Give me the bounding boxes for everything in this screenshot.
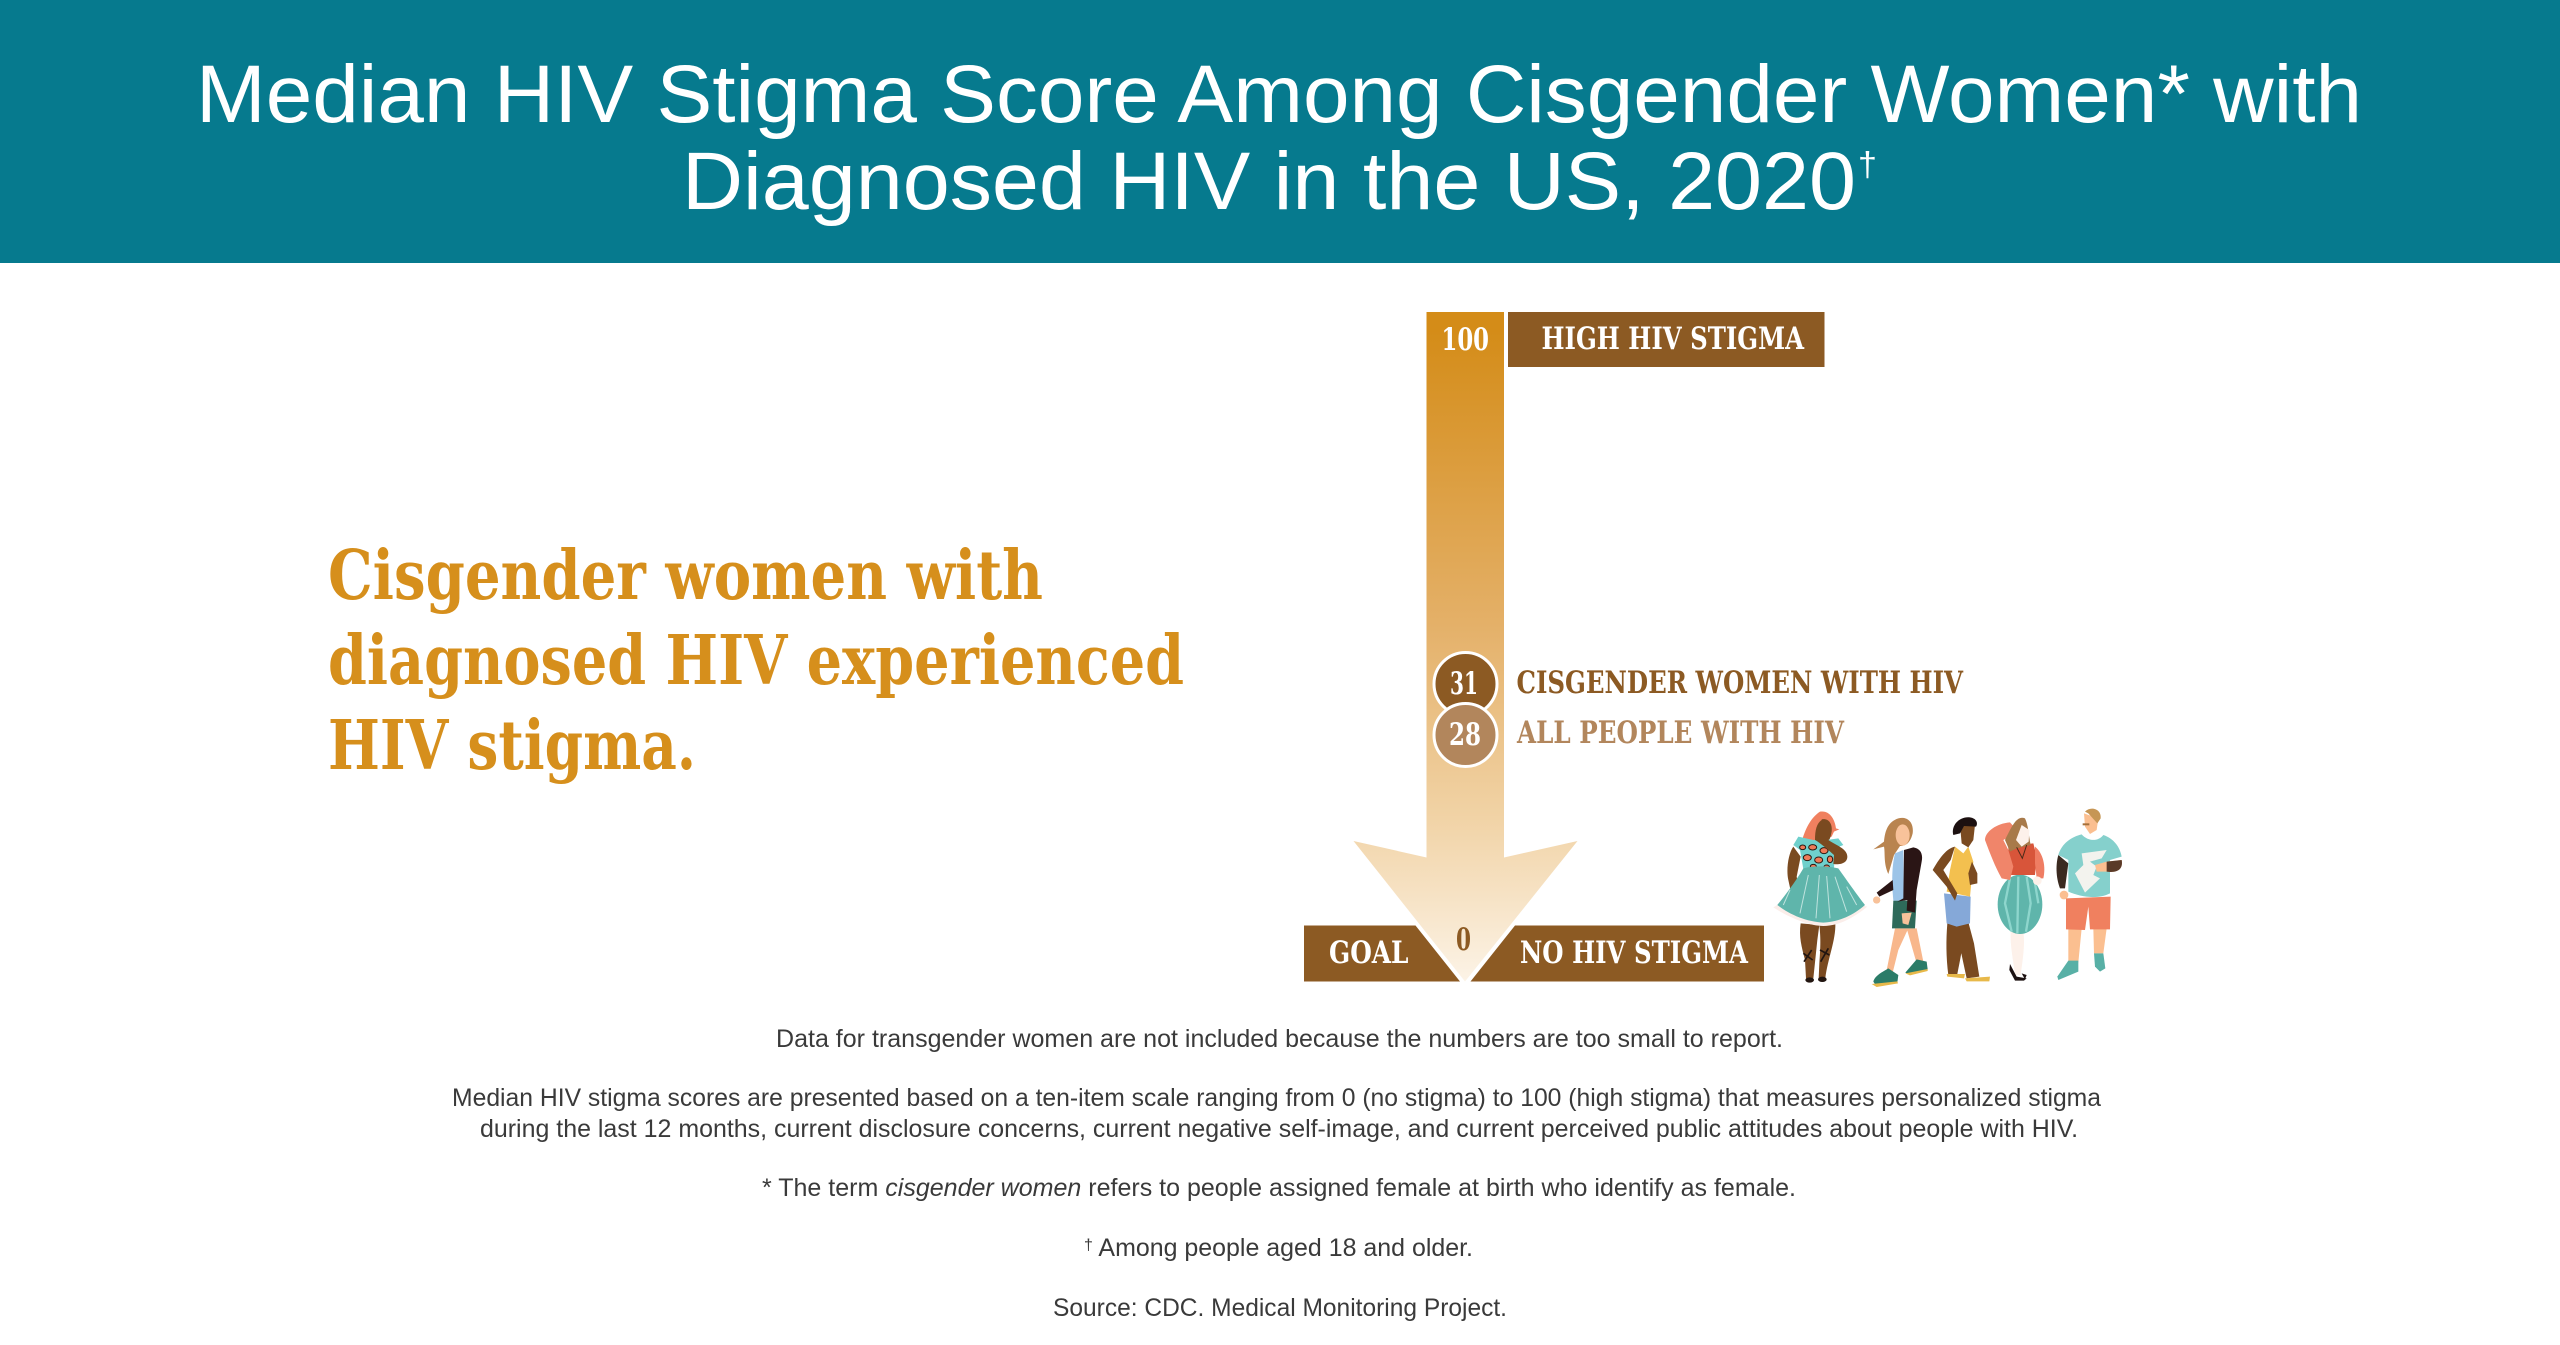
label: high HIV stigma	[1508, 312, 1824, 367]
person 2	[1872, 818, 1928, 987]
note: age range: †	[1084, 1237, 1093, 1254]
note: stigma scale explanation: during the last 12 months, current disclosure concerns, current negative self-image, and current perceived public attitudes about people with HIV.	[480, 1115, 2078, 1143]
footnotes	[452, 1025, 2101, 1322]
label: no HIV stigma	[1470, 926, 1764, 982]
note: source: Source: CDC. Medical Monitoring Project.	[1053, 1294, 1507, 1322]
person 5	[2057, 809, 2122, 980]
note: age range: Among people aged 18 and older.	[1093, 1234, 1473, 1262]
person 4	[1985, 818, 2044, 981]
title: Diagnosed HIV in the US, 2020	[682, 136, 1856, 227]
note: stigma scale explanation	[452, 1084, 2101, 1143]
person 3	[1933, 817, 1990, 981]
header banner	[0, 0, 2560, 263]
title	[196, 49, 2362, 227]
key message heading: HIV stigma.	[328, 706, 696, 786]
label: goal	[1304, 926, 1460, 982]
label: goal: GOAL	[1329, 935, 1409, 971]
marker: cisgender women 31: 31	[1450, 666, 1478, 702]
scale value 0: 0	[1456, 922, 1471, 958]
marker: cisgender women 31	[1434, 652, 1497, 716]
stigma scale arrow chart	[1304, 312, 1964, 982]
label: no HIV stigma: NO HIV STIGMA	[1520, 935, 1749, 971]
title: †	[1858, 146, 1877, 184]
gradient arrow	[1354, 312, 1578, 982]
key message heading	[328, 536, 1184, 786]
scale value 100: 100	[1442, 322, 1489, 358]
label: high HIV stigma: HIGH HIV STIGMA	[1542, 321, 1805, 357]
note: stigma scale explanation: Median HIV stigma scores are presented based on a ten-item scale ranging from 0 (no stigma) to 100 (high stigma) that measures personalized stigma	[452, 1084, 2101, 1112]
marker: all people 28	[1434, 704, 1497, 766]
person 1	[1773, 811, 1867, 983]
note: transgender women: Data for transgender women are not included because the numbers are too small to report.	[776, 1025, 1783, 1053]
key message heading: diagnosed HIV experienced	[328, 621, 1184, 701]
illustration: group of five people	[1773, 809, 2122, 987]
label: all people with HIV: ALL PEOPLE WITH HIV	[1516, 715, 1845, 751]
label: cisgender women with HIV: CISGENDER WOMEN WITH HIV	[1516, 665, 1964, 701]
title: Median HIV Stigma Score Among Cisgender Women* with	[196, 49, 2362, 140]
marker: all people 28: 28	[1449, 717, 1481, 753]
note: cisgender definition: * The term cisgender women refers to people assigned female at birth who identify as female.	[762, 1174, 1796, 1202]
key message heading: Cisgender women with	[328, 536, 1043, 616]
